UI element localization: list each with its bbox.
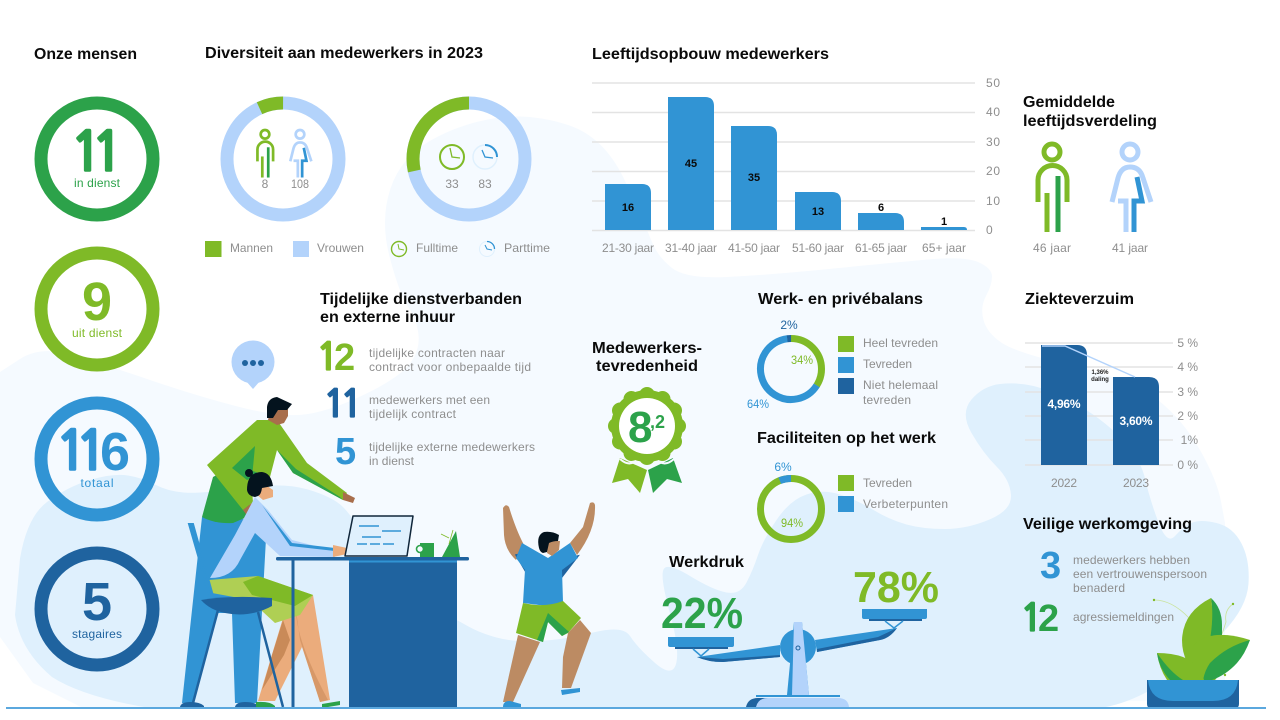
heading: Tijdelijke dienstverbanden [320, 291, 522, 326]
legend: diversiteit [205, 241, 550, 257]
donut: fulltime parttime: 83 [478, 177, 492, 191]
bar chart: leeftijdsopbouw: 21-30 jaar [602, 241, 654, 255]
bar chart: leeftijdsopbouw: 31-40 jaar [665, 241, 717, 255]
bar chart: ziekteverzuim: daling [1091, 377, 1109, 383]
bar chart: leeftijdsopbouw [592, 76, 1000, 255]
legend: werk prive: Heel tevreden [863, 336, 938, 350]
icon: vrouw 41 jaar [1112, 144, 1151, 255]
mug and plant [416, 530, 460, 557]
stat: 78 procent: 78% [853, 563, 939, 612]
laptop [345, 516, 413, 556]
stat: 116 totaal [41, 403, 153, 515]
bar chart: ziekteverzuim: 3,60% [1120, 414, 1153, 428]
bar chart: leeftijdsopbouw: 1 [941, 216, 947, 228]
bar chart: leeftijdsopbouw: 65+ jaar [922, 241, 966, 255]
icon: man 46 jaar [1033, 144, 1071, 255]
background blob: light [0, 117, 1225, 708]
bar chart: ziekteverzuim: 5 % [1177, 336, 1198, 350]
icon: vrouw 41 jaar: 41 jaar [1112, 241, 1148, 255]
heading: Ziekteverzuim: Ziekteverzuim [1025, 291, 1134, 308]
stat: 5 stagaires: 5 [82, 572, 112, 632]
stat: 11 in dienst [41, 103, 153, 215]
stats: veilige werkomgeving [1020, 545, 1207, 640]
heading: Diversiteit: Diversiteit aan medewerkers in 2023 [205, 45, 483, 62]
bar chart: ziekteverzuim: 2 % [1177, 409, 1198, 423]
bar chart: ziekteverzuim: 2022 [1051, 476, 1077, 490]
bar chart: ziekteverzuim [1025, 336, 1198, 490]
icon: vrouw [290, 130, 311, 178]
bar chart: leeftijdsopbouw: 10 [986, 194, 1000, 208]
stats: veilige werkomgeving: 3 [1040, 545, 1061, 587]
badge: score 8,2: 8 [628, 403, 652, 452]
bar chart: ziekteverzuim: 3 % [1177, 385, 1198, 399]
bar chart: ziekteverzuim: 1% [1181, 433, 1198, 447]
legend: werk prive: tevreden [863, 393, 911, 407]
donut: werk prive: 2% [780, 318, 798, 332]
stats: tijdelijke dienstverbanden: contract voor onbepaalde tijd [369, 360, 531, 374]
donut: fulltime parttime: 33 [445, 177, 459, 191]
bar chart: ziekteverzuim: 1,36% [1091, 370, 1109, 376]
icon: parttime clock [473, 145, 497, 169]
bar chart: leeftijdsopbouw: 0 [986, 223, 993, 237]
legend: diversiteit: Parttime [504, 241, 550, 255]
stats: veilige werkomgeving: agressiemeldingen [1073, 610, 1174, 624]
icon: speech bubble [232, 340, 274, 389]
stats: tijdelijke dienstverbanden: tijdelijke externe medewerkers [369, 440, 535, 454]
legend: diversiteit: Mannen [230, 241, 273, 255]
stat: 116 totaal: 11 [55, 426, 108, 479]
donut: fulltime parttime [402, 92, 536, 226]
heading: Tijdelijke dienstverbanden: Tijdelijke dienstverbanden [320, 291, 522, 308]
icon: man 46 jaar: 46 jaar [1033, 241, 1071, 255]
man standing [180, 397, 355, 708]
bar chart: leeftijdsopbouw: 40 [986, 105, 1000, 119]
heading: Leeftijdsopbouw: Leeftijdsopbouw medewerkers [592, 46, 829, 63]
heading: Werkdruk: Werkdruk [669, 554, 744, 571]
heading: Gemiddelde leeftijdsverdeling: leeftijdsverdeling [1023, 113, 1157, 130]
woman seated [209, 469, 347, 708]
bar chart: leeftijdsopbouw: 45 [685, 158, 697, 170]
bar chart: leeftijdsopbouw: 20 [986, 164, 1000, 178]
stats: tijdelijke dienstverbanden: 11 [323, 385, 363, 423]
icon: weighing scale [668, 609, 927, 707]
heading: Faciliteiten op het werk: Faciliteiten op het werk [757, 430, 936, 447]
stats: tijdelijke dienstverbanden [316, 337, 535, 473]
heading: Onze mensen: Onze mensen [34, 46, 137, 63]
bar chart: leeftijdsopbouw: 41-50 jaar [728, 241, 780, 255]
bar chart: leeftijdsopbouw: 61-65 jaar [855, 241, 907, 255]
bar chart: leeftijdsopbouw: 51-60 jaar [792, 241, 844, 255]
stats: veilige werkomgeving: 2 [1038, 598, 1059, 640]
stats: tijdelijke dienstverbanden: tijdelijke contracten naar [369, 346, 505, 360]
legend: diversiteit: Fulltime [416, 241, 458, 255]
stats: tijdelijke dienstverbanden: in dienst [369, 454, 415, 468]
bar chart: leeftijdsopbouw: 13 [812, 206, 824, 218]
stats: tijdelijke dienstverbanden: 2 [334, 337, 355, 379]
bar chart: leeftijdsopbouw: 6 [878, 202, 884, 214]
donut: faciliteiten [751, 460, 831, 549]
stat: 116 totaal: totaal [80, 476, 114, 490]
panel: onze mensen stat circles [41, 103, 153, 665]
legend: werk prive: Tevreden [863, 357, 912, 371]
bar chart: ziekteverzuim: 4,96% [1048, 397, 1081, 411]
stats: veilige werkomgeving: benaderd [1073, 581, 1125, 595]
donut: faciliteiten: 6% [774, 460, 792, 474]
stat: 11 in dienst: in dienst [74, 176, 121, 190]
heading: Medewerkerstevredenheid: Medewerkers- [592, 340, 702, 357]
stats: tijdelijke dienstverbanden: tijdelijk contract [369, 407, 457, 421]
bar chart: leeftijdsopbouw: 16 [622, 202, 634, 214]
stats: veilige werkomgeving: een vertrouwenspersoon [1073, 567, 1207, 581]
legend: diversiteit: Vrouwen [317, 241, 364, 255]
stats: tijdelijke dienstverbanden: 1 [316, 338, 339, 376]
legend: werk prive: Niet helemaal [863, 378, 938, 392]
ground line [6, 707, 1266, 709]
legend: faciliteiten: Verbeterpunten [863, 497, 948, 511]
stat: 11 in dienst: 11 [70, 127, 124, 180]
illustration: desk scene [180, 340, 469, 708]
icon: man [257, 130, 273, 178]
heading: Medewerkerstevredenheid [592, 340, 702, 375]
bar chart: ziekteverzuim: 2023 [1123, 476, 1149, 490]
heading: Tijdelijke dienstverbanden: en externe inhuur [320, 309, 455, 326]
stat: 9 uit dienst: uit dienst [72, 326, 123, 340]
donut: mannen vrouwen: 108 [291, 177, 309, 191]
illustration: cheering person [503, 502, 595, 708]
bar chart: leeftijdsopbouw: 50 [986, 76, 1000, 90]
background blob: darker [15, 383, 1249, 708]
icon: plant [1147, 598, 1250, 708]
badge: score 8,2: ,2 [650, 412, 665, 432]
stat: 116 totaal: 6 [100, 422, 130, 482]
stat: 22 procent: 22% [661, 589, 743, 638]
stat: 5 stagaires: stagaires [72, 627, 122, 641]
badge: score 8,2 [608, 387, 686, 493]
stats: tijdelijke dienstverbanden: medewerkers met een [369, 393, 490, 407]
heading: Medewerkerstevredenheid: tevredenheid [596, 358, 698, 375]
stats: veilige werkomgeving: 1 [1020, 599, 1043, 637]
chair [189, 524, 283, 707]
stat: 5 stagaires [41, 553, 153, 665]
donut: mannen vrouwen [209, 85, 357, 233]
stats: tijdelijke dienstverbanden: 5 [335, 431, 356, 473]
heading: Veilige werkomgeving: Veilige werkomgeving [1023, 516, 1192, 533]
legend: faciliteiten: Tevreden [863, 476, 912, 490]
donut: faciliteiten: 94% [781, 516, 803, 530]
heading: Gemiddelde leeftijdsverdeling [1023, 94, 1157, 130]
stat: 9 uit dienst: 9 [82, 272, 112, 332]
heading: Gemiddelde leeftijdsverdeling: Gemiddelde [1023, 94, 1115, 111]
desk [276, 557, 469, 708]
icon: fulltime clock [440, 145, 464, 169]
stat: 9 uit dienst [41, 253, 153, 365]
bar chart: leeftijdsopbouw: 30 [986, 135, 1000, 149]
donut: werk prive [747, 318, 833, 411]
legend: werk prive [838, 336, 938, 407]
donut: mannen vrouwen: 8 [262, 177, 269, 191]
bar chart: ziekteverzuim: 4 % [1177, 360, 1198, 374]
bar chart: leeftijdsopbouw: 35 [748, 172, 760, 184]
legend: faciliteiten [838, 475, 948, 512]
stats: veilige werkomgeving: medewerkers hebben [1073, 553, 1190, 567]
bar chart: ziekteverzuim: 0 % [1177, 458, 1198, 472]
donut: werk prive: 64% [747, 397, 769, 411]
donut: werk prive: 34% [791, 353, 813, 367]
heading: Werk- en privebalans: Werk- en privébalans [758, 291, 923, 308]
